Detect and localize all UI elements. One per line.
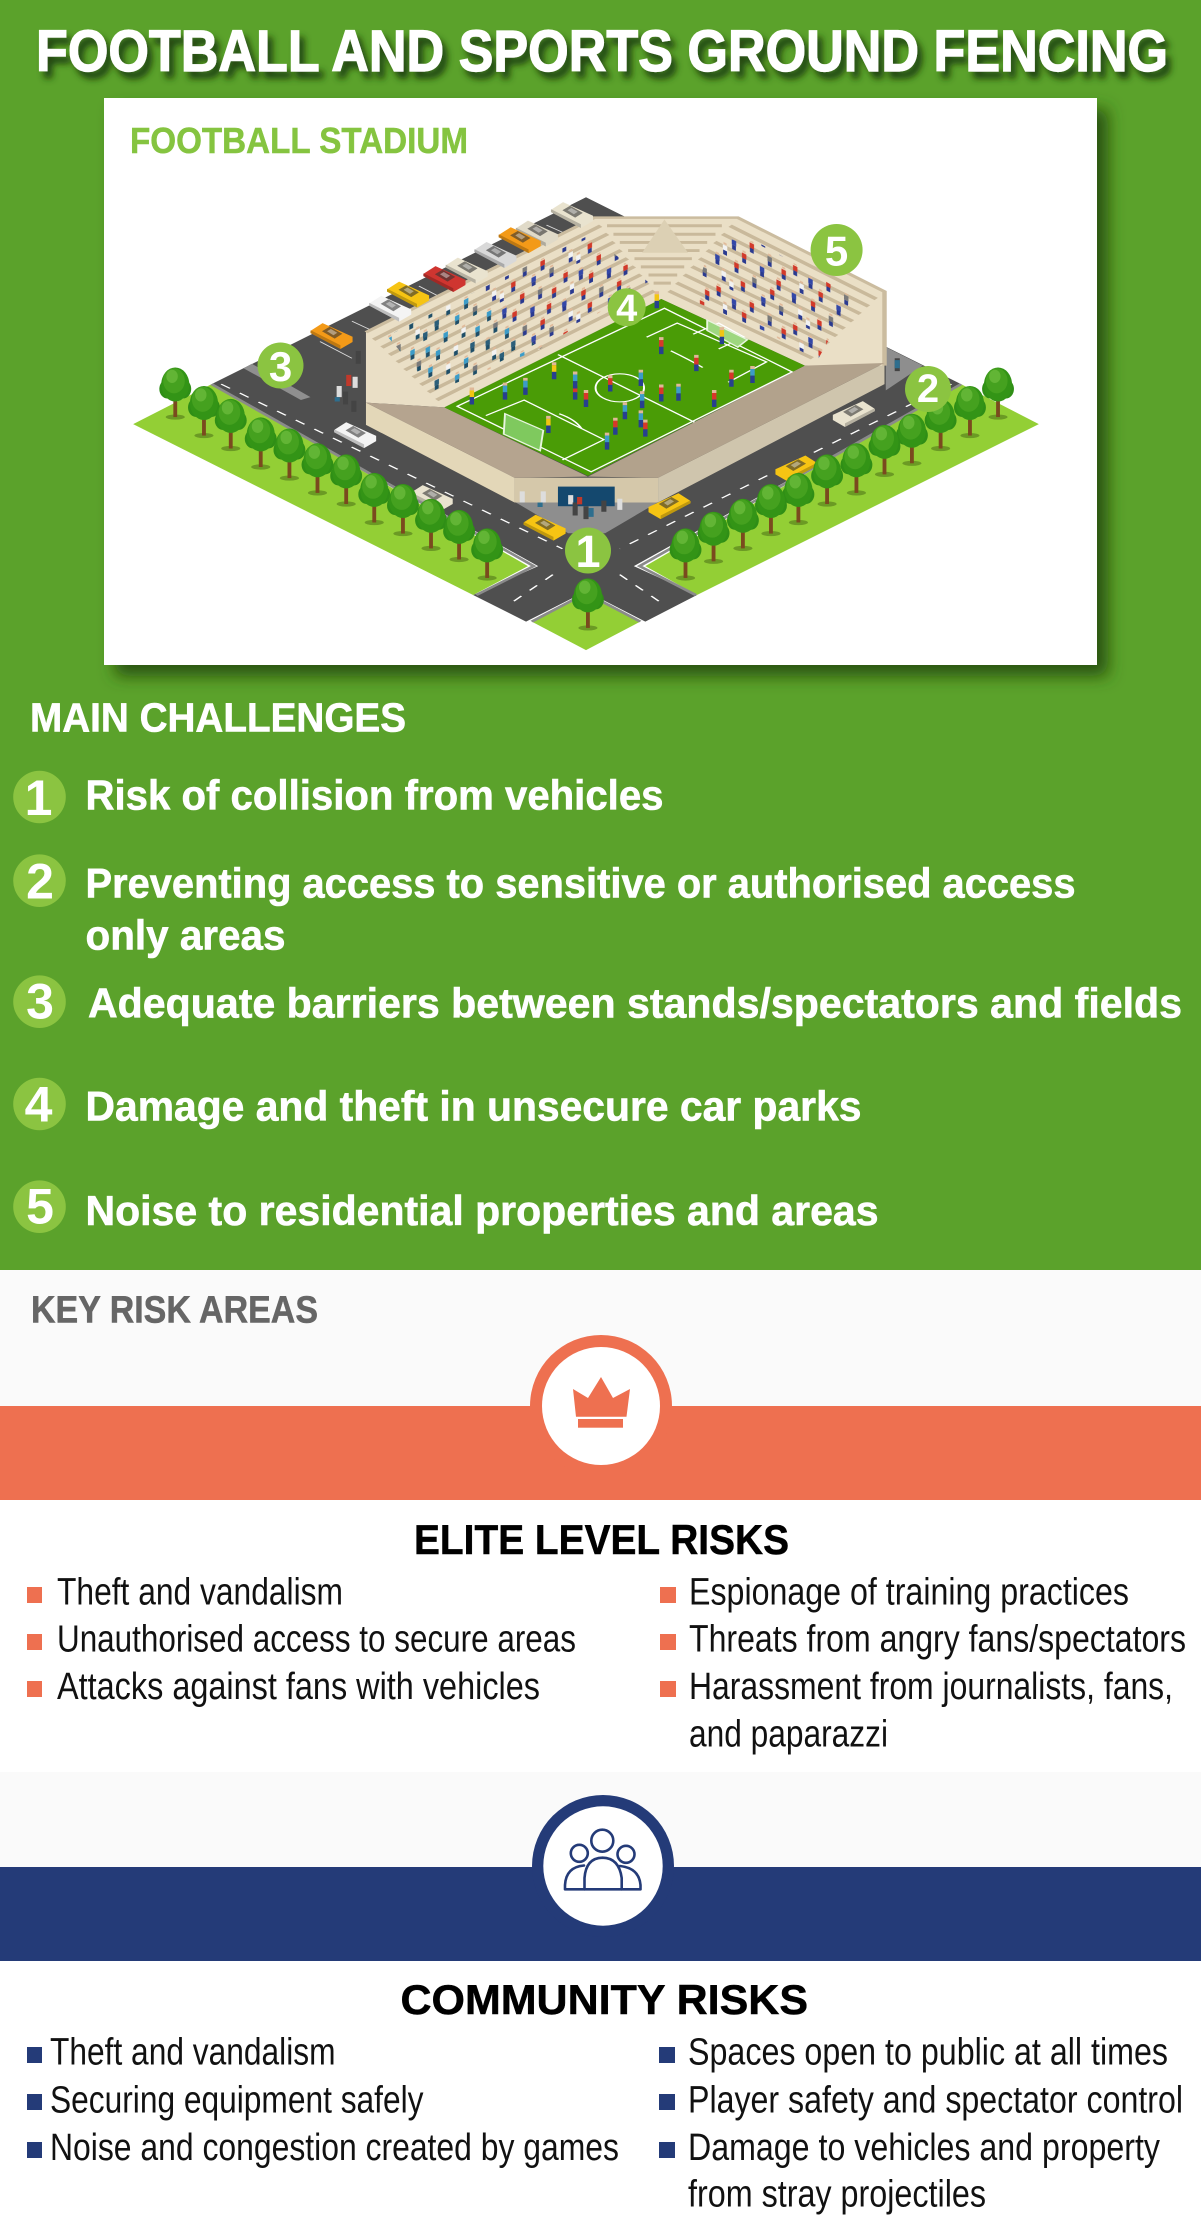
map marker 5: 5 (825, 228, 848, 274)
elite risks right list (660, 1571, 1186, 1756)
map marker 2: 2 (917, 367, 939, 411)
stadium card (104, 98, 1097, 665)
community risks left list: Securing equipment safely (50, 2079, 424, 2121)
challenge 5: Noise to residential properties and areas (86, 1187, 878, 1234)
heading: key risk areas: KEY RISK AREAS (31, 1290, 318, 1332)
challenge 2: 2 (26, 853, 54, 909)
map marker 4: 4 (616, 288, 637, 330)
trees (159, 367, 1014, 631)
map marker 5 (811, 224, 863, 276)
elite risks left list (27, 1571, 576, 1708)
map marker 1 (565, 526, 611, 577)
challenge 2: Preventing access to sensitive or authorised access (86, 859, 1076, 906)
heading: elite level risks: ELITE LEVEL RISKS (414, 1516, 789, 1563)
players (472, 291, 752, 450)
elite risks left list: Unauthorised access to secure areas (57, 1619, 576, 1661)
crowd in stands (387, 234, 853, 392)
roads (212, 197, 961, 622)
community risks left list: Noise and congestion created by games (50, 2127, 619, 2169)
community risks right list (659, 2031, 1183, 2216)
card heading: FOOTBALL STADIUM (130, 120, 468, 161)
challenge 1: Risk of collision from vehicles (86, 771, 664, 818)
elite risks left list: Theft and vandalism (57, 1571, 343, 1613)
spectators outside (337, 351, 897, 519)
challenge 3: 3 (26, 974, 54, 1030)
community risks left list: Theft and vandalism (50, 2031, 336, 2073)
challenge 2 (13, 853, 1076, 958)
community risks left list (27, 2031, 619, 2169)
map marker 1: 1 (575, 526, 601, 577)
football pitch (444, 299, 805, 476)
heading: main challenges: MAIN CHALLENGES (30, 694, 406, 740)
challenge 4: Damage and theft in unsecure car parks (86, 1083, 862, 1130)
cars and vehicles (310, 202, 875, 541)
icon: crown (530, 1335, 672, 1477)
icon: people group (532, 1795, 674, 1937)
challenge 3: Adequate barriers between stands/spectators and fields (88, 979, 1182, 1026)
challenge 5: 5 (26, 1178, 54, 1234)
lawns (133, 384, 1039, 650)
heading: community risks: COMMUNITY RISKS (400, 1976, 808, 2023)
map marker 4 (608, 288, 646, 330)
challenge 2: only areas (86, 911, 286, 958)
isometric stadium illustration (133, 197, 1039, 650)
orange band (0, 1406, 1201, 1500)
challenge 4: 4 (25, 1077, 53, 1133)
community risks right list: from stray projectiles (688, 2174, 986, 2216)
elite risks left list: Attacks against fans with vehicles (57, 1666, 540, 1708)
elite risks right list: and paparazzi (689, 1714, 888, 1756)
elite risks right list: Espionage of training practices (689, 1571, 1129, 1613)
panel: green header and challenges (0, 0, 1201, 1270)
stadium structure (366, 218, 884, 506)
map marker 3 (258, 342, 304, 390)
map marker 3: 3 (269, 343, 292, 390)
panel: key risk areas elite (0, 1270, 1201, 1756)
map marker 2 (905, 366, 951, 412)
panel: community risks (0, 1772, 1201, 2216)
challenge 1: 1 (25, 770, 52, 826)
blue band (0, 1867, 1201, 1961)
